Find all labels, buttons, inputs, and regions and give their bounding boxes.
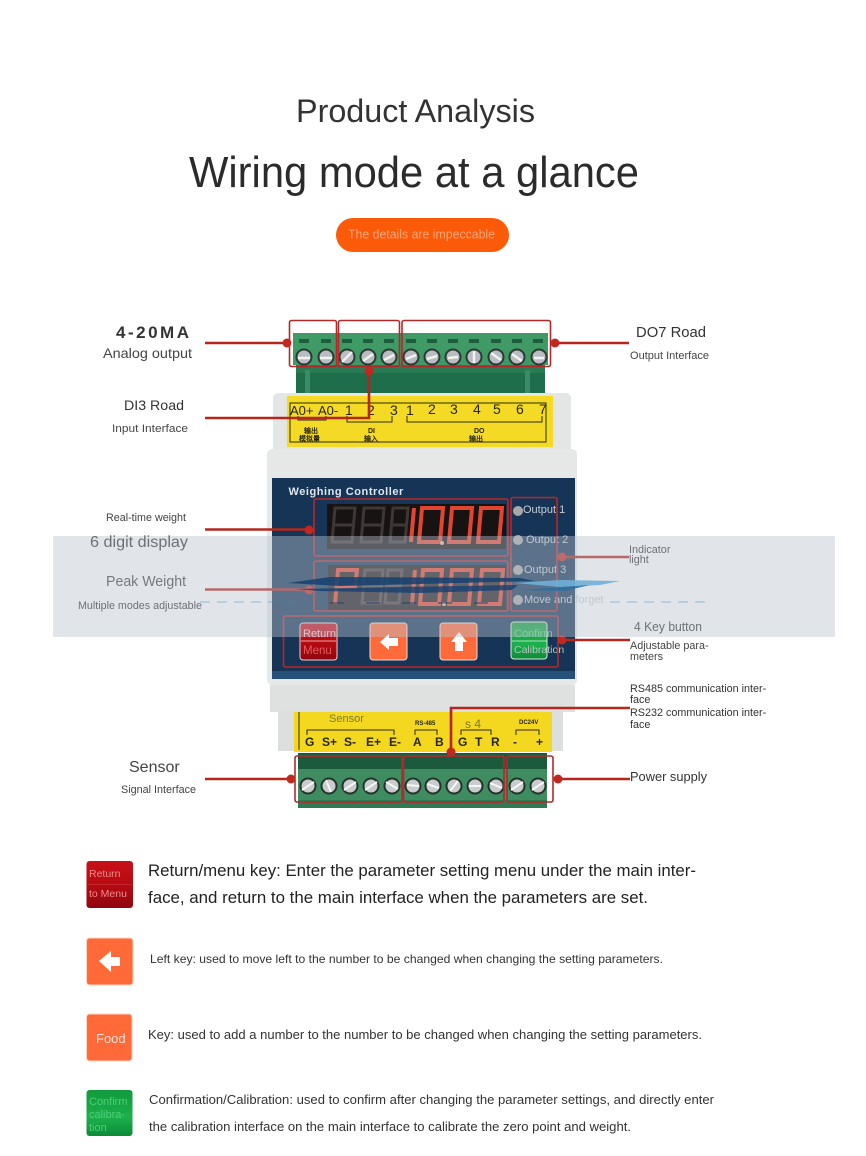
- label: 4 key button: 4 Key button: [634, 620, 702, 634]
- callout line: sensor: [205, 774, 296, 784]
- text block: the calibration interface on the main interface to calibrate the zero point and weight.: [149, 1120, 631, 1134]
- lower yellow label: R: [491, 735, 500, 749]
- label: DI3 road: [112, 397, 188, 435]
- key legend: up: [86, 1014, 702, 1061]
- label: 4 key button: meters: [630, 651, 664, 663]
- upper yellow label: 输入: [364, 434, 378, 443]
- label: peak weight: [78, 574, 202, 612]
- lower yellow label: E-: [389, 735, 401, 749]
- upper yellow label: [287, 396, 553, 447]
- lower housing: [270, 685, 575, 751]
- label: indicator light: Indicator: [629, 544, 671, 556]
- indicator lights: Output 1: [523, 504, 565, 516]
- label: peak weight: Multiple modes adjustable: [78, 600, 202, 612]
- label: DI3 road: Input Interface: [112, 423, 188, 435]
- callout line: indicator light: [558, 552, 629, 562]
- icon: return key: [86, 861, 133, 908]
- controller device: [267, 333, 604, 808]
- button: confirm calibration: Confirm: [514, 628, 553, 640]
- callout line: 6 digit display: [205, 526, 314, 534]
- display: real-time weight: [327, 504, 506, 549]
- indicator lights: Output 2: [526, 534, 568, 546]
- label: 4-20MA analog output: Analog output: [103, 345, 192, 361]
- upper yellow label: 2: [367, 402, 375, 418]
- label: peak weight: Peak Weight: [106, 574, 186, 590]
- upper green terminal block: [293, 333, 548, 393]
- middle housing: [267, 449, 577, 685]
- lower green terminal block: [298, 753, 547, 808]
- label: DO7 road: Output Interface: [630, 350, 709, 362]
- label: sensor: Sensor: [129, 759, 180, 776]
- icon: food key: Food: [96, 1031, 126, 1046]
- icon: return key: Return: [89, 868, 121, 880]
- icon: return key: to Menu: [89, 888, 127, 900]
- front panel: [272, 478, 604, 679]
- callout line: 4 key button: [558, 636, 630, 644]
- lower yellow label: +: [536, 735, 543, 749]
- upper yellow label: 3: [450, 401, 458, 417]
- icon: confirm key: [86, 1090, 132, 1136]
- callout line: peak weight: [205, 586, 314, 594]
- button: confirm calibration: [511, 622, 564, 659]
- label: DI3 road: DI3 Road: [124, 397, 184, 413]
- lower yellow label: s 4: [465, 717, 481, 731]
- label: indicator light: [629, 544, 671, 566]
- button: left arrow: [370, 623, 407, 660]
- label: 4-20MA analog output: 4-20MA: [116, 323, 189, 342]
- title: Wiring mode at a glance: [189, 148, 639, 197]
- text block: [148, 861, 696, 907]
- label: indicator light: light: [629, 554, 649, 566]
- key legend: confirm: [86, 1090, 714, 1136]
- upper yellow label: 输出: [304, 426, 318, 435]
- label: 4 key button: Adjustable para-: [630, 640, 709, 652]
- lower yellow label: S+: [322, 735, 337, 749]
- lower yellow label: -: [513, 735, 517, 749]
- label: 6 digit display: Real-time weight: [106, 512, 186, 524]
- label: 6 digit display: 6 digit display: [90, 534, 188, 551]
- label: 6 digit display: [90, 512, 188, 551]
- lower yellow label: [294, 712, 552, 752]
- label: 4 key button: [630, 620, 709, 663]
- translucent watermark band: [53, 536, 835, 637]
- lower yellow label: DC24V: [519, 720, 538, 726]
- lower yellow label: T: [475, 735, 483, 749]
- icon: confirm key: tion: [89, 1122, 107, 1134]
- upper yellow label: 1: [345, 402, 353, 418]
- upper yellow label: 7: [539, 401, 547, 417]
- indicator lights: [513, 504, 604, 606]
- badge: the details are impeccable: [336, 218, 509, 252]
- text block: Key: used to add a number to the number to be changed when changing the setting parameters.: [148, 1028, 702, 1042]
- key legend: left: [86, 938, 663, 985]
- button: return menu: Menu: [303, 645, 332, 657]
- indicator lights: Output 3: [524, 564, 566, 576]
- upper yellow label: 6: [516, 401, 524, 417]
- button: up arrow: [440, 623, 477, 660]
- upper housing: [273, 393, 571, 453]
- button: confirm calibration: Calibration: [514, 644, 564, 656]
- callout line: DI3 road: [205, 366, 374, 418]
- label: DO7 road: DO7 Road: [636, 325, 706, 341]
- label: DO7 road: [630, 325, 709, 362]
- lower yellow label: S-: [344, 735, 356, 749]
- text block: face, and return to the main interface when the parameters are set.: [148, 888, 648, 907]
- label: RS485 RS232: face: [630, 694, 650, 706]
- display: peak weight: [328, 565, 506, 610]
- watermark streaks: [200, 577, 710, 603]
- upper yellow label: A0-: [318, 403, 338, 418]
- lower yellow label: RS-485: [415, 721, 436, 727]
- upper yellow label: 1: [406, 402, 414, 418]
- upper yellow label: 模拟量: [299, 434, 320, 443]
- text block: [149, 1093, 714, 1134]
- callout line: DO7 road: [550, 338, 629, 348]
- upper yellow label: A0+: [290, 403, 314, 418]
- label: RS485 RS232: RS232 communication inter-: [630, 707, 767, 719]
- upper yellow label: DO: [474, 428, 485, 435]
- label: RS485 RS232: face: [630, 719, 650, 731]
- button: return menu: [300, 623, 337, 660]
- upper yellow label: 2: [428, 401, 436, 417]
- icon: food key: [86, 1014, 132, 1061]
- callout line: 4-20MA: [205, 338, 292, 348]
- heading: product analysis: Product Analysis: [296, 93, 535, 129]
- lower yellow label: G: [458, 735, 467, 749]
- lower yellow label: B: [435, 735, 444, 749]
- callout line: power supply: [554, 774, 630, 784]
- text block: Left key: used to move left to the number to be changed when changing the setting parameters.: [150, 952, 663, 966]
- upper yellow label: 3: [390, 402, 398, 418]
- callout frames: [284, 320, 558, 802]
- icon: confirm key: Confirm: [89, 1096, 128, 1108]
- upper yellow label: 4: [473, 401, 481, 417]
- indicator lights: Move and forget: [524, 594, 604, 606]
- lower yellow label: A: [413, 735, 422, 749]
- label: sensor: Signal Interface: [121, 784, 196, 796]
- upper yellow label: 5: [493, 401, 501, 417]
- panel name: Weighing Controller: [288, 486, 404, 498]
- lower yellow label: Sensor: [329, 713, 364, 725]
- button: return menu: Return: [303, 628, 336, 640]
- label: RS485 RS232: RS485 communication inter-: [630, 683, 767, 695]
- lower yellow label: E+: [366, 735, 381, 749]
- text block: Return/menu key: Enter the parameter setting menu under the main inter-: [148, 861, 696, 880]
- label: power supply: Power supply: [630, 769, 707, 784]
- icon: confirm key: calibra-: [89, 1109, 125, 1121]
- icon: left key: [86, 938, 133, 985]
- badge: the details are impeccable: The details are impeccable: [348, 228, 495, 242]
- key legend: return menu: [86, 861, 696, 908]
- lower yellow label: G: [305, 735, 314, 749]
- upper yellow label: 输出: [469, 434, 483, 443]
- text block: Confirmation/Calibration: used to confirm after changing the parameter settings, and directly enter: [149, 1093, 714, 1107]
- label: sensor: [121, 759, 196, 796]
- label: RS485 RS232: [630, 683, 767, 731]
- label: 4-20MA analog output: [103, 323, 192, 361]
- upper yellow label: DI: [368, 428, 375, 435]
- callout line: RS485 RS232: [446, 708, 630, 756]
